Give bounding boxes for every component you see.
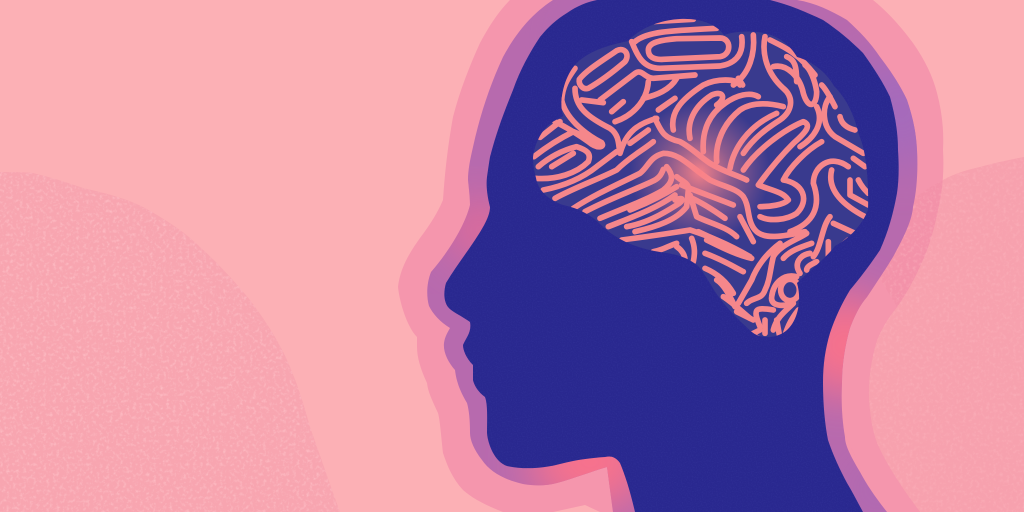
head outer pink halo <box>398 0 943 512</box>
halo edge restoring pink <box>830 262 920 512</box>
central glow <box>634 106 766 238</box>
head silhouette <box>444 0 899 512</box>
maze lines <box>534 19 868 338</box>
head purple-to-pink layer <box>427 0 918 512</box>
right background blob <box>830 157 1024 512</box>
left background blob <box>0 172 340 512</box>
brain base <box>533 20 868 337</box>
brain with maze pattern <box>533 18 868 337</box>
